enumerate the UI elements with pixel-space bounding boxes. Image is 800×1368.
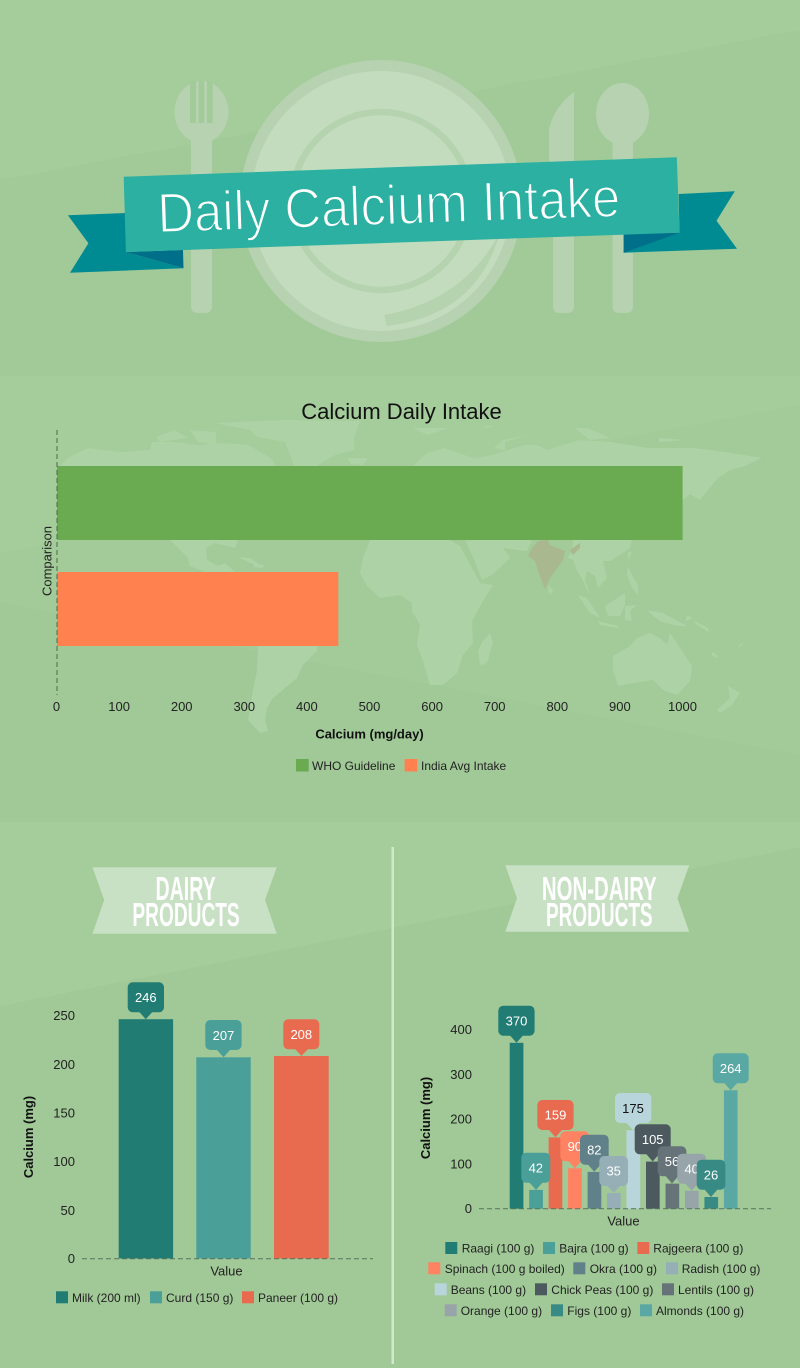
callout: Okra 82: 82: [587, 1142, 602, 1158]
bar: WHO Guideline: [57, 466, 683, 540]
y axis ticks: 50: [61, 1203, 75, 1218]
chart: Calcium Daily Intake: [40, 399, 697, 773]
x axis label: Value: [607, 1214, 640, 1228]
y axis ticks: 100: [53, 1154, 75, 1169]
legend: Milk (200 ml): [72, 1291, 141, 1305]
callout: Okra 82: [580, 1135, 609, 1172]
callout: Almonds 264: [713, 1053, 749, 1090]
legend: [428, 1242, 760, 1318]
legend: Curd (150 g): [166, 1291, 233, 1305]
legend: Beans (100 g): [451, 1283, 526, 1297]
chart title: Calcium Daily Intake: [301, 399, 502, 424]
callout: 207: 207: [213, 1028, 234, 1043]
legend: WHO Guideline: [312, 759, 396, 773]
y axis ticks: 150: [53, 1106, 75, 1120]
chart: non-dairy products: [418, 1006, 771, 1318]
x axis ticks: 300: [233, 699, 255, 714]
heading: dairy products: DAIRY: [156, 870, 216, 907]
y axis ticks: 200: [53, 1057, 75, 1072]
x axis ticks: 1000: [668, 699, 697, 714]
icon: knife: [549, 92, 574, 313]
heading: non-dairy products: [505, 865, 689, 933]
x axis ticks: 600: [421, 699, 443, 714]
y axis label: Comparison: [40, 526, 54, 596]
heading: dairy products: PRODUCTS: [132, 896, 240, 933]
y axis ticks: 0: [465, 1201, 472, 1216]
chart: dairy products: [21, 982, 373, 1305]
icon: spoon: [596, 83, 649, 313]
legend: Chick Peas (100 g): [551, 1283, 653, 1297]
callout: Figs 26: [697, 1160, 725, 1197]
banner fold right: [624, 233, 680, 253]
legend: Rajgeera (100 g): [653, 1242, 743, 1256]
callout: Lentils 56: [658, 1146, 686, 1184]
callout: Bajra 42: [521, 1153, 550, 1190]
legend: Bajra (100 g): [559, 1242, 629, 1256]
callout: Chick Peas 105: 105: [642, 1132, 664, 1147]
heading: dairy products: [92, 867, 277, 934]
legend: [56, 1291, 338, 1305]
legend: Figs (100 g): [567, 1304, 631, 1318]
y axis ticks: 200: [450, 1112, 472, 1127]
callout: Rajgeera 159: 159: [545, 1108, 566, 1123]
x axis ticks: 100: [108, 699, 130, 714]
y axis ticks: 250: [53, 1008, 75, 1023]
y axis label: Calcium (mg): [21, 1096, 36, 1178]
legend: Lentils (100 g): [678, 1283, 754, 1297]
callout: Chick Peas 105: [635, 1124, 671, 1162]
callout: Beans 175: [615, 1093, 651, 1130]
callout: Raagi 370: 370: [506, 1014, 527, 1028]
callout: Spinach 90: 90: [568, 1139, 582, 1154]
callout: 207: [205, 1020, 242, 1057]
callout: Orange 40: [677, 1154, 706, 1191]
heading: non-dairy products: PRODUCTS: [546, 896, 653, 933]
x axis ticks: 500: [359, 699, 380, 714]
callout: Radish 35: [599, 1156, 628, 1193]
banner body: [124, 157, 679, 252]
callout: Orange 40: 40: [684, 1162, 699, 1176]
banner fold left: [126, 250, 184, 268]
x axis ticks: [53, 699, 697, 714]
y axis ticks: 400: [450, 1022, 472, 1037]
callout: 246: 246: [135, 990, 157, 1005]
x axis label: Value: [210, 1264, 243, 1278]
callout: Figs 26: 26: [704, 1168, 718, 1182]
divider: [392, 847, 394, 1364]
y axis ticks: 0: [68, 1251, 75, 1266]
bar: milk: [119, 1019, 173, 1258]
legend: Almonds (100 g): [656, 1304, 744, 1318]
callout: Beans 175: 175: [622, 1101, 644, 1116]
legend: India Avg Intake: [421, 759, 507, 773]
heading: non-dairy products: NON-DAIRY: [542, 870, 657, 907]
y axis ticks: [53, 1008, 75, 1266]
map highlight: India: [528, 540, 580, 589]
world map: [60, 420, 762, 733]
x axis label: Calcium (mg/day): [315, 726, 424, 742]
y axis ticks: 100: [450, 1156, 472, 1172]
callout: Rajgeera 159: [537, 1100, 574, 1137]
callout: Raagi 370: [498, 1006, 535, 1043]
banner tail right: [624, 191, 737, 253]
x axis ticks: 800: [546, 699, 568, 714]
legend: Orange (100 g): [461, 1304, 542, 1318]
x axis ticks: 0: [53, 699, 60, 714]
legend: [296, 759, 507, 773]
banner tail left: [68, 213, 184, 273]
bar: paneer: [274, 1056, 329, 1258]
bar: India Avg Intake: [57, 572, 338, 646]
x axis ticks: 200: [171, 699, 193, 714]
y axis label: Calcium (mg): [418, 1077, 433, 1159]
callout: Bajra 42: 42: [529, 1160, 543, 1176]
x axis ticks: 700: [484, 699, 506, 714]
callout: 246: [128, 982, 164, 1019]
callout: Almonds 264: 264: [720, 1061, 742, 1076]
callout: Spinach 90: [560, 1131, 589, 1168]
y axis ticks: 300: [450, 1067, 472, 1082]
icon: fork: [174, 81, 228, 313]
callout: Lentils 56: 56: [665, 1154, 679, 1169]
icon: plate: [240, 60, 522, 342]
callout: Radish 35: 35: [606, 1164, 621, 1179]
callout: 208: 208: [290, 1027, 312, 1042]
bars: [510, 1043, 738, 1209]
x axis ticks: 900: [609, 699, 631, 714]
legend: Spinach (100 g boiled): [445, 1262, 565, 1276]
legend: Paneer (100 g): [258, 1291, 338, 1305]
title banner: [68, 157, 737, 273]
bar: curd: [196, 1057, 251, 1258]
legend: Radish (100 g): [682, 1262, 760, 1276]
legend: Raagi (100 g): [462, 1242, 534, 1256]
legend: Okra (100 g): [590, 1262, 657, 1276]
callout: 208: [283, 1019, 319, 1056]
panel: header illustration: [174, 60, 649, 342]
x axis ticks: 400: [296, 699, 318, 714]
title: Daily Calcium Intake: [156, 165, 621, 244]
y axis ticks: [450, 1022, 472, 1216]
